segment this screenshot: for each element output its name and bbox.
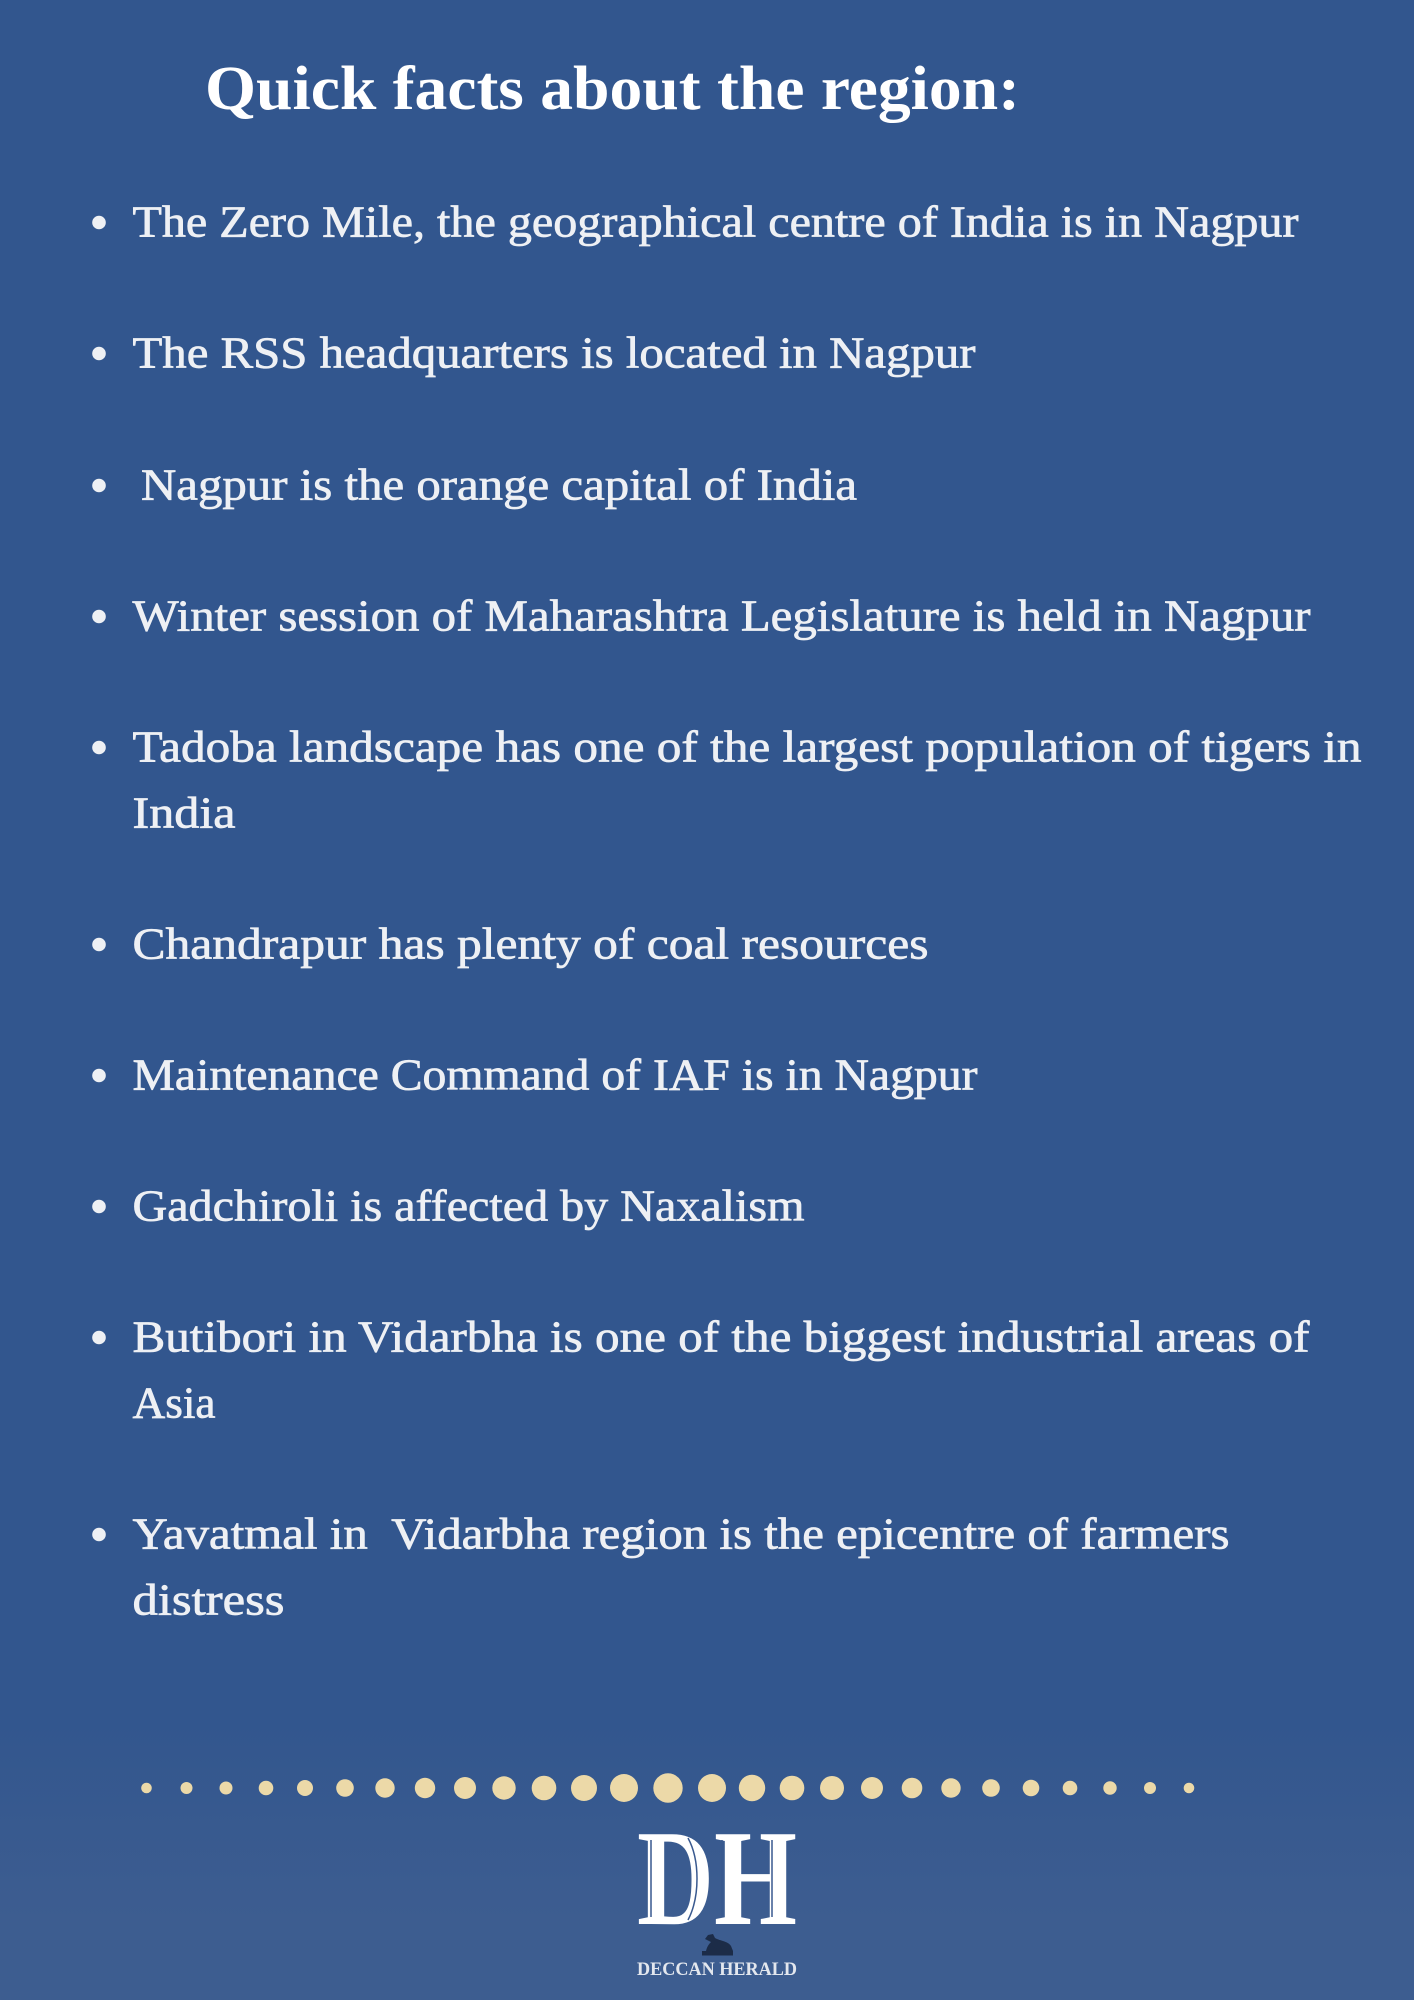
dotted divider (141, 1773, 1194, 1803)
fact list (92, 198, 1362, 1624)
fact 9: Butibori: Butibori in Vidarbha is one of the biggest industrial areas of (132, 1312, 1310, 1362)
logo: DH monogram: DH (637, 1802, 797, 1954)
fact 10: Yavatmal: Yavatmal in Vidarbha region is the epicentre of farmers (132, 1510, 1230, 1558)
title: Quick facts about the region: (205, 55, 1020, 123)
fact 5: Tadoba tigers: India (132, 788, 236, 838)
fact 5: Tadoba tigers: Tadoba landscape has one of the largest population of tigers in (132, 722, 1362, 772)
fact 10: Yavatmal: distress (132, 1576, 284, 1624)
fact 8: Gadchiroli: Gadchiroli is affected by Naxalism (132, 1182, 804, 1230)
fact 6: Chandrapur coal: Chandrapur has plenty of coal resources (132, 920, 928, 968)
fact 7: Maintenance Command: Maintenance Command of IAF is in Nagpur (132, 1050, 978, 1100)
fact 3: orange capital: Nagpur is the orange capital of India (141, 460, 857, 510)
fact 1: Zero Mile: The Zero Mile, the geographical centre of India is in Nagpur (132, 198, 1299, 246)
fact 9: Butibori (92, 1312, 1310, 1428)
fact 10: Yavatmal (92, 1510, 1230, 1624)
icon: bull (702, 1934, 733, 1956)
logo: wordmark: DECCAN HERALD (637, 1960, 797, 1980)
Deccan Herald logo (637, 1802, 797, 1980)
fact 2: RSS headquarters: The RSS headquarters is located in Nagpur (132, 328, 976, 378)
fact 9: Butibori: Asia (132, 1378, 216, 1428)
fact 5: Tadoba tigers (92, 722, 1362, 838)
fact 4: winter session: Winter session of Maharashtra Legislature is held in Nagpur (132, 592, 1311, 640)
